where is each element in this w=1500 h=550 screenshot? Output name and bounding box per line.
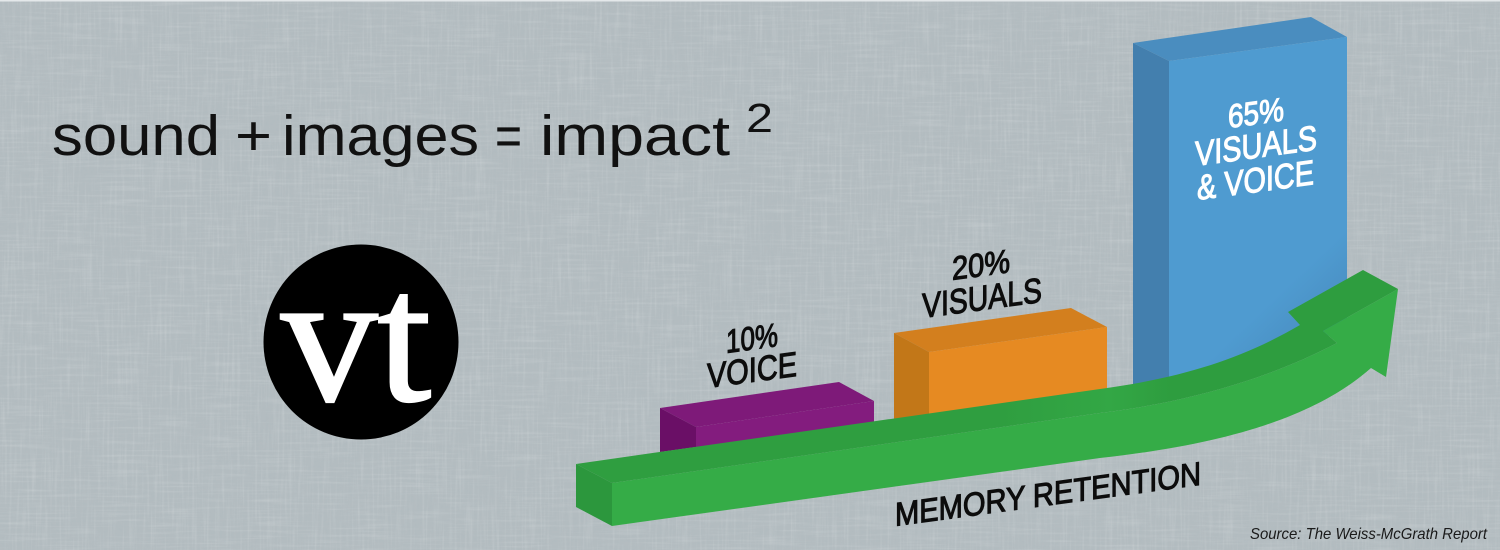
- label: 65% visuals and voice: & VOICE: [1197, 153, 1314, 208]
- title: images: [282, 104, 479, 168]
- label: 10% voice: VOICE: [707, 345, 797, 396]
- label: 10% voice: [707, 317, 797, 396]
- title: =: [495, 104, 522, 168]
- logo: vt circle: vt: [281, 235, 431, 441]
- label: 10% voice: 10%: [726, 317, 778, 361]
- title: [52, 95, 773, 168]
- label: 20% visuals: [922, 243, 1042, 326]
- axis label: memory retention: MEMORY RETENTION: [895, 456, 1201, 534]
- chart: memory retention bars: [576, 17, 1398, 526]
- bar: blue visuals and voice: [1133, 17, 1347, 392]
- label: 65% visuals and voice: VISUALS: [1195, 119, 1317, 174]
- superscript 2: 2: [746, 95, 773, 141]
- source note: Source: The Weiss-McGrath Report: [1250, 526, 1488, 543]
- title: sound: [52, 104, 220, 168]
- label: 20% visuals: 20%: [952, 243, 1010, 288]
- title: impact: [540, 104, 730, 168]
- arrow: green memory retention: [576, 270, 1398, 526]
- bar: orange visuals: [894, 308, 1107, 424]
- bar: purple voice: [660, 382, 874, 452]
- label: 20% visuals: VISUALS: [922, 271, 1042, 326]
- label: 65% visuals and voice: [1195, 92, 1317, 208]
- title: +: [235, 104, 272, 168]
- label: 65% visuals and voice: 65%: [1228, 92, 1284, 136]
